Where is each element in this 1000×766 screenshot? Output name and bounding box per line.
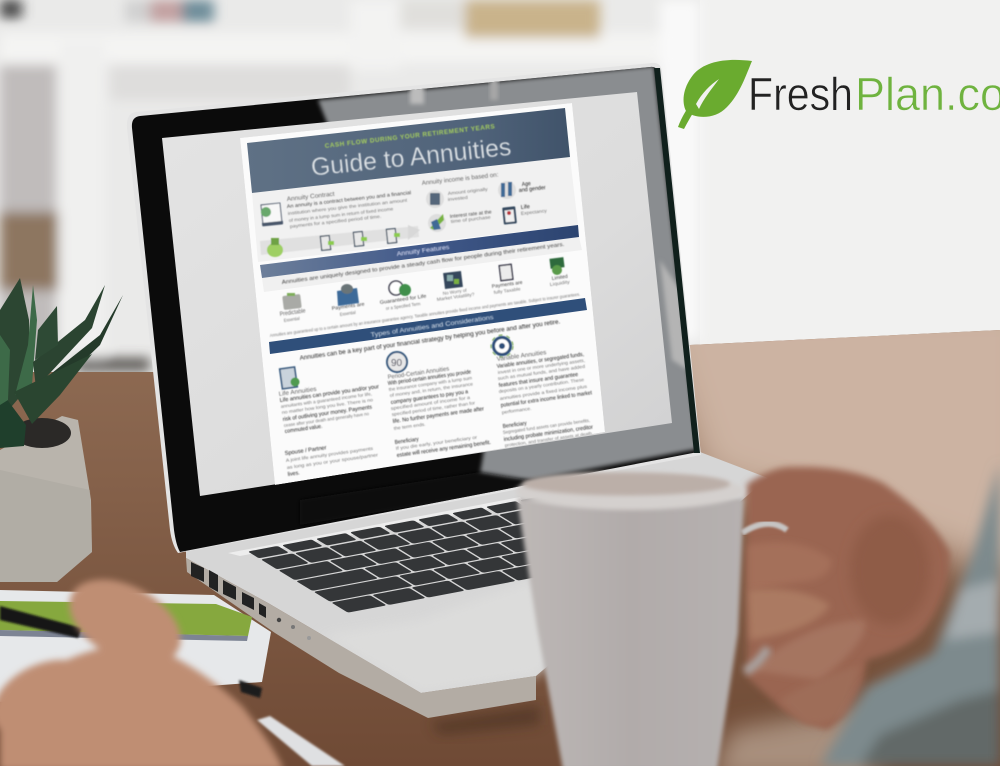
- annuity contract block: payments for a specified period of time.: [290, 214, 382, 229]
- logo wordmark: Fresh: [748, 68, 853, 120]
- payment flow arrow strip: [260, 225, 420, 257]
- column: period-certain annuities: company guarantees to pay you a: [390, 389, 469, 406]
- column: life annuities: Life Annuities: [278, 386, 317, 398]
- column: period-certain annuities: estate will receive any remaining benefit.: [396, 440, 492, 459]
- types of annuities band: [269, 298, 587, 354]
- feature: fully taxable: Payments are: [491, 280, 523, 290]
- feature: payments are guaranteed: Payments are: [331, 301, 365, 312]
- feature: guaranteed for life: or a Specified Term: [385, 301, 421, 311]
- left hand holding pen: [0, 562, 284, 766]
- column: variable annuities: deposits on a yearly contribution. These: [498, 377, 585, 394]
- document on screen: Guide to Annuities: [240, 103, 605, 485]
- feature: fully taxable: [491, 264, 523, 295]
- column: life annuities: A joint life annuity provides payments: [285, 446, 374, 463]
- annuity income factors block: and gender: [519, 185, 546, 194]
- feature: limited liquidity: Liquidity: [549, 279, 571, 287]
- icon: contract: [261, 203, 283, 226]
- column: variable annuities: Variable Annuities: [496, 349, 547, 363]
- grey reflection on top, right and lower-right bezel: [300, 66, 697, 525]
- column: life annuities: Spouse / Partner: [284, 445, 327, 457]
- annuity contract block: of money in a lump sum in return of fixed income: [289, 206, 394, 223]
- annuity contract block: [261, 190, 411, 229]
- coffee mug: [516, 472, 787, 766]
- top keyboard highlight: [228, 497, 524, 556]
- icon: target: [491, 335, 513, 357]
- rim: [516, 472, 744, 510]
- annuity income factors block: Age: [522, 181, 531, 188]
- logo wordmark: [748, 68, 1000, 120]
- column: life annuities: annuitants with a guaranteed income for life,: [280, 391, 372, 409]
- column: variable annuities: annuities provide a fixed income plus: [499, 384, 588, 401]
- green banner on paper: [0, 601, 252, 636]
- icon: leaf: [678, 60, 752, 129]
- icon: document badge: [280, 367, 300, 389]
- column: period-certain annuities: the insurance company with a lump sum: [388, 375, 472, 392]
- column: life annuities: lives.: [287, 470, 301, 478]
- wooden desk: [0, 290, 1000, 766]
- column: life annuities: [278, 367, 379, 478]
- icon: phone payment 2: [353, 232, 367, 246]
- icon: 90 badge: 90: [391, 358, 403, 369]
- feature: guaranteed for life: [379, 281, 427, 311]
- feature: predictable: Predictable: [279, 307, 306, 318]
- FreshPlan.co logo: [678, 60, 1000, 129]
- side ports: [191, 562, 311, 640]
- white cable on desk: [257, 716, 345, 766]
- top sections background: [252, 157, 578, 262]
- chassis side and front chamfer: [186, 558, 536, 718]
- body: [517, 498, 744, 766]
- column: period-certain annuities: specified period of time, rather than for: [391, 400, 476, 417]
- annuity income factors block: Annuity income is based on:: [421, 171, 499, 187]
- column: life annuities: Life annuities can provide you and/or your: [279, 384, 379, 404]
- feature: market volatility: Market Volatility?: [436, 292, 475, 302]
- fingers: [748, 542, 832, 590]
- column: life annuities: as long as you or your spouse/partner: [286, 452, 379, 470]
- column: life annuities: risk of outliving your money. Payments: [282, 404, 373, 423]
- title: Guide to Annuities: [310, 133, 513, 182]
- column: period-certain annuities: specified amount of income for a: [390, 395, 471, 411]
- annuity contract block: An annuity is a contract between you and a financial: [287, 190, 411, 210]
- annuity income factors block: Life: [521, 204, 530, 211]
- annuity income factors block: time of purchase: [451, 215, 491, 224]
- feature: limited liquidity: [549, 257, 571, 287]
- paper under left hand: [0, 590, 271, 702]
- icon: phone payment 1: [320, 236, 334, 250]
- feature: payments are guaranteed: [331, 284, 365, 317]
- column: variable annuities: invest in one or more underlying assets,: [497, 358, 585, 375]
- right hand gripping mug: [747, 467, 950, 730]
- types of annuities band: Types of Annuities and Considerations: [370, 314, 495, 339]
- icon: phone payment 3: [386, 229, 400, 243]
- column: variable annuities: Variable annuities, or segregated funds,: [496, 352, 585, 370]
- column: period-certain annuities: Period-Certain Annuities: [387, 365, 450, 381]
- icon: age and gender: [498, 181, 516, 199]
- annuity income factors block: Expectancy: [521, 208, 548, 216]
- column: life annuities: commuted value.: [284, 424, 323, 435]
- column: period-certain annuities: Beneficiary: [394, 437, 419, 446]
- annuity contract block: institution where you give the institution an amount: [288, 198, 408, 216]
- laptop lid: [127, 63, 701, 553]
- column: period-certain annuities: the term ends.: [393, 422, 426, 431]
- icon: life expectancy: [502, 206, 517, 225]
- column: variable annuities: Beneficiary: [502, 421, 527, 430]
- column: variable annuities: potential for extra income linked to market: [500, 390, 593, 409]
- column: life annuities: no matter how long you live. There is no: [281, 397, 374, 415]
- bezel: [127, 63, 701, 553]
- column: variable annuities: performance.: [501, 406, 532, 415]
- feature: guaranteed for life: Guaranteed for Life: [379, 293, 427, 306]
- annuity income factors block: Interest rate at the: [450, 209, 492, 220]
- column: life annuities: cease after your death and generally have no: [283, 411, 370, 428]
- annuity income factors block: invested: [448, 195, 468, 202]
- column: variable annuities: features that insure and guarantee: [498, 372, 578, 389]
- feature: fully taxable: fully Taxable: [493, 286, 521, 295]
- icon: interest rates: [428, 214, 446, 232]
- feature: market volatility: No Worry of: [442, 288, 468, 296]
- column: variable annuities: Segregated fund assets can provide benefits,: [502, 418, 590, 435]
- footnote: Annuities are guaranteed up to a certain amount by an insurance guarantee agency. Taxable annuities provide fixed income and payments are taxable. Subject to insurer guarantees.: [269, 292, 580, 338]
- pen: [0, 606, 82, 638]
- column: variable annuities: including probate minimization, creditor: [503, 424, 594, 443]
- column: variable annuities: [491, 335, 594, 448]
- gray display area: [162, 92, 672, 496]
- laptop base with keyboard: [186, 452, 768, 718]
- aloe leaves: [0, 278, 30, 420]
- hand: [0, 562, 284, 766]
- subtitle: CASH FLOW DURING YOUR RETIREMENT YEARS: [324, 123, 496, 150]
- annuity income factors block: Amount originally: [448, 186, 489, 196]
- handle: [742, 524, 787, 533]
- potted plant: [0, 278, 123, 582]
- keyboard keys: [248, 495, 650, 613]
- annuity income factors block: [421, 171, 548, 232]
- types intro sentence: Annuities can be a key part of your financial strategy by helping you before and after you retire.: [299, 319, 561, 362]
- header band: [247, 108, 570, 193]
- feature: predictable: [279, 293, 306, 323]
- silver chassis top: [186, 452, 768, 693]
- column: variable annuities: protection, and transfer of assets at death: [504, 431, 593, 448]
- icon: money bag: [267, 238, 283, 257]
- icon: amount invested: [426, 190, 444, 208]
- annuity contract block: Annuity Contract: [286, 191, 335, 203]
- column: period-certain annuities: life. No further payments are made after: [392, 406, 485, 425]
- column: period-certain annuities: of money and, in return, the insurance: [389, 381, 474, 398]
- feature: predictable: Essential: [283, 316, 300, 323]
- column: variable annuities: such as mutual funds, and have added: [497, 364, 586, 381]
- features intro sentence: Annuities are uniquely designed to provide a steady cash flow for people during their retirement years.: [281, 242, 565, 286]
- concrete pot: [0, 416, 92, 582]
- column: period-certain annuities: [387, 352, 492, 459]
- feature: limited liquidity: Limited: [551, 274, 568, 282]
- feature: market volatility: [436, 271, 475, 302]
- annuity features band: [260, 225, 579, 278]
- annuity features band: Annuity Features: [396, 245, 450, 258]
- feature: payments are guaranteed: Essential: [339, 310, 356, 317]
- column: period-certain annuities: If you die early, your beneficiary or: [395, 435, 478, 451]
- column: period-certain annuities: With period-certain annuities you provide: [387, 369, 471, 387]
- blue-grey shirt sleeve: [820, 463, 1000, 766]
